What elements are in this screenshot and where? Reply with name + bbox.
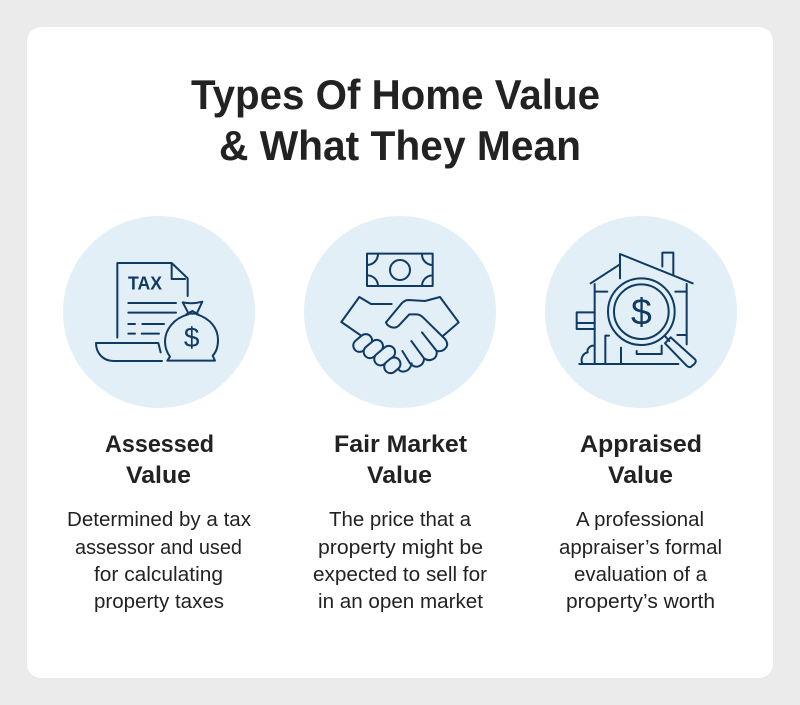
title: Types Of Home Value bbox=[191, 71, 600, 118]
icon: house under magnifying glass: $ bbox=[631, 290, 652, 332]
icon circle: assessed value bbox=[63, 216, 255, 408]
description: assessed value: assessor and used bbox=[75, 537, 242, 559]
heading: fair market value: Fair Market bbox=[334, 431, 467, 458]
heading: appraised value bbox=[580, 431, 702, 489]
title: & What They Mean bbox=[219, 122, 581, 169]
panel: appraised value bbox=[545, 216, 737, 613]
description: assessed value: Determined by a tax bbox=[67, 509, 251, 531]
description: appraised value: A professional bbox=[576, 509, 704, 531]
description: assessed value: property taxes bbox=[94, 591, 224, 613]
panel: fair market value bbox=[304, 216, 496, 613]
description: fair market value: The price that a bbox=[329, 509, 472, 531]
title bbox=[191, 71, 600, 169]
heading: assessed value: Assessed bbox=[105, 431, 214, 458]
heading: fair market value bbox=[334, 431, 467, 489]
description: fair market value: expected to sell for bbox=[313, 564, 487, 586]
description: fair market value: property might be bbox=[318, 537, 483, 559]
panel: assessed value bbox=[63, 216, 255, 613]
description: fair market value bbox=[313, 509, 487, 613]
description: appraised value: appraiser’s formal bbox=[559, 537, 722, 559]
heading: fair market value: Value bbox=[367, 462, 432, 489]
icon: tax document and money bag: $ bbox=[184, 322, 200, 353]
icon: banknote and handshake bbox=[341, 254, 459, 376]
description: appraised value: evaluation of a bbox=[574, 564, 708, 586]
description: assessed value: for calculating bbox=[94, 564, 223, 586]
icon circle: appraised value bbox=[545, 216, 737, 408]
heading: assessed value bbox=[105, 431, 214, 489]
heading: assessed value: Value bbox=[126, 462, 191, 489]
description: assessed value bbox=[67, 509, 251, 613]
description: fair market value: in an open market bbox=[318, 591, 483, 613]
icon: tax document and money bag bbox=[96, 263, 218, 361]
heading: appraised value: Appraised bbox=[580, 431, 702, 458]
icon: house under magnifying glass bbox=[577, 253, 696, 367]
icon circle: fair market value bbox=[304, 216, 496, 408]
description: appraised value bbox=[559, 509, 722, 613]
description: appraised value: property’s worth bbox=[566, 591, 715, 613]
icon: tax document and money bag: TAX bbox=[128, 273, 163, 294]
heading: appraised value: Value bbox=[608, 462, 673, 489]
